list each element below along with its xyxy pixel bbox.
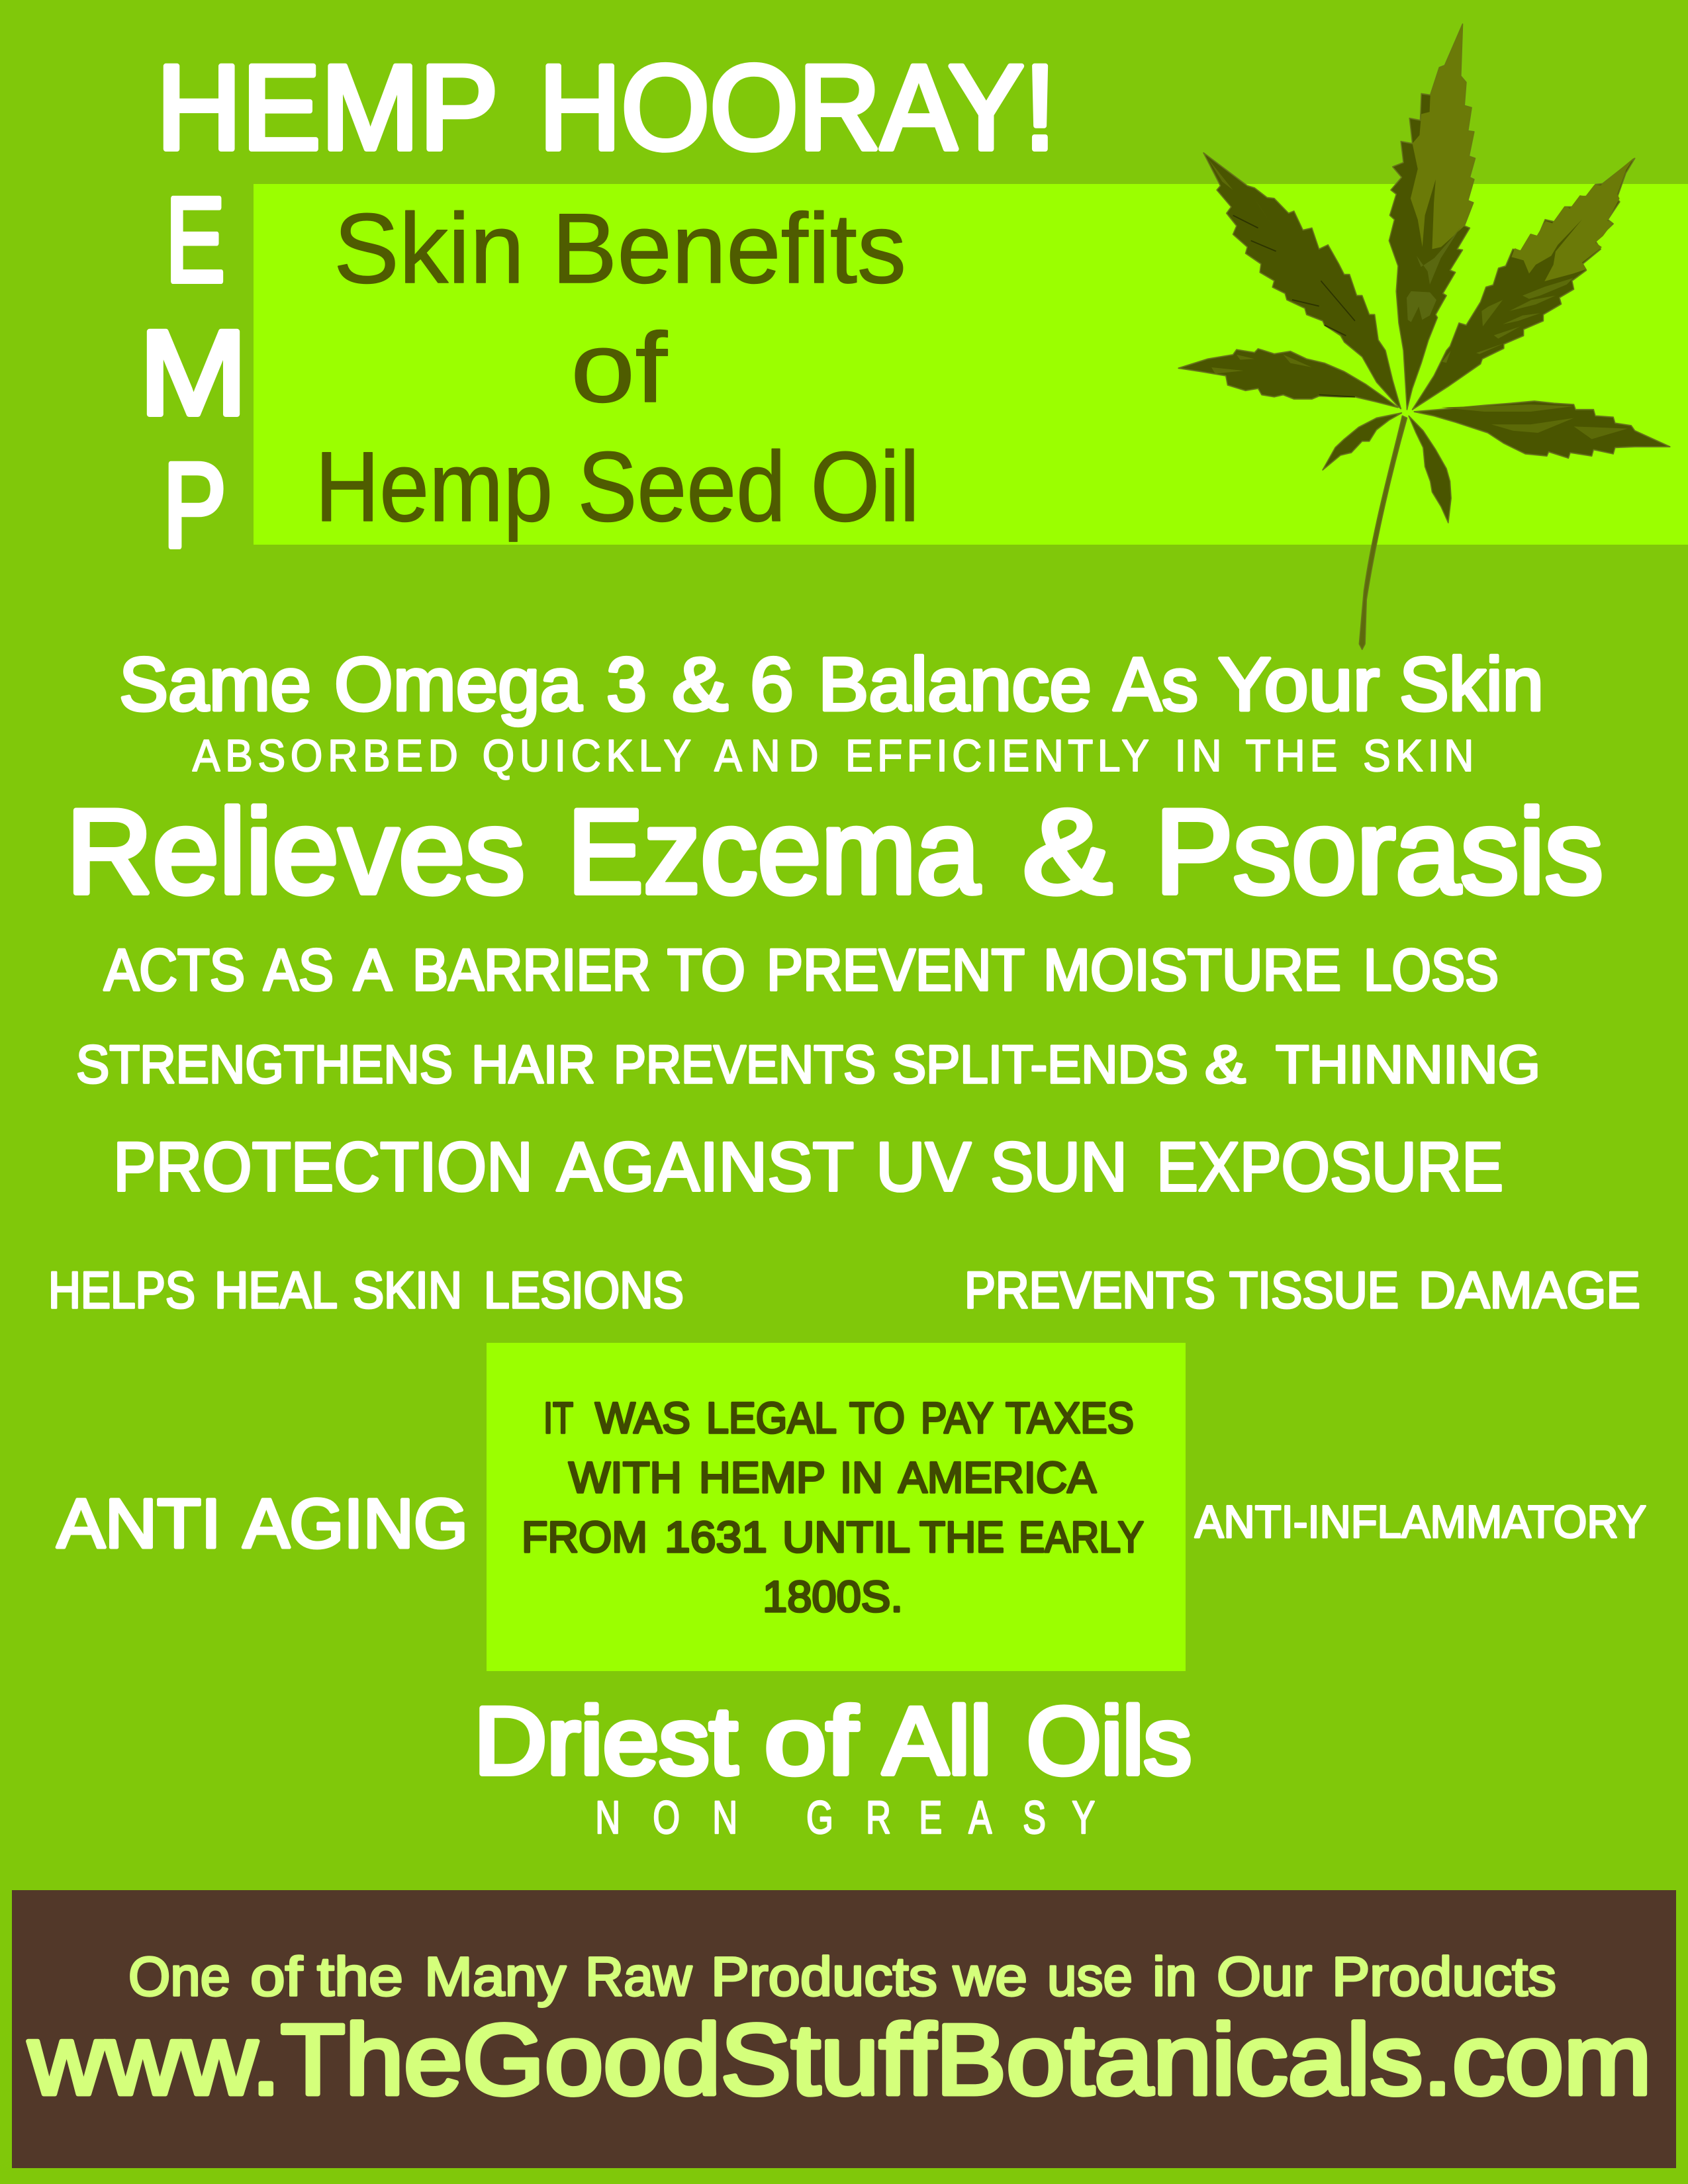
benefit: moisture barrier: BARRIER [412,936,651,1003]
benefit: uv protection [113,1128,1503,1206]
vertical title letters [139,172,248,572]
benefit: prevents tissue damage [964,1261,1640,1319]
benefit: driest of all oils: All [883,1688,992,1794]
title: HEMP HOORAY! [156,40,1056,175]
footer tagline: Products [1332,1946,1556,2007]
callout: hemp taxes fact: PAY [921,1393,994,1442]
footer tagline: Our [1217,1946,1312,2007]
benefit: strengthens hair: SPLIT-ENDS [892,1035,1188,1095]
callout: hemp taxes fact: TAXES [1006,1393,1134,1442]
callout: hemp taxes fact: THE [919,1512,1004,1561]
benefit: absorbed quickly: QUICKLY [483,731,691,781]
footer tagline [128,1946,1556,2007]
benefit: heals skin lesions: HELPS [48,1261,195,1319]
benefit: uv protection: PROTECTION [113,1128,533,1206]
benefit: strengthens hair [76,1035,1540,1095]
benefit: absorbed quickly: ABSORBED [193,731,458,781]
benefit: uv protection: AGAINST [557,1128,854,1206]
benefit: absorbed quickly: THE [1245,731,1337,781]
heading: skin benefits of hemp seed oil: Hemp Seed Oil [315,431,919,542]
callout: hemp taxes fact [487,1343,1186,1671]
benefit: omega balance: As [1113,643,1198,727]
callout: hemp taxes fact: IT [543,1393,573,1442]
vertical title letters: M [139,305,248,440]
benefit: moisture barrier: TO [667,936,745,1003]
panel: footer [12,1890,1676,2168]
callout: hemp taxes fact: LEGAL [706,1393,837,1442]
callout: hemp taxes fact: AMERICA [898,1453,1096,1502]
benefit: omega balance: 3 [606,643,647,727]
benefit: absorbed quickly [193,731,1474,781]
benefit: omega balance: & [672,643,728,727]
benefit: relieves ezcema and psorasis: Ezcema [567,785,980,919]
benefit: moisture barrier: LOSS [1364,936,1499,1003]
benefit: relieves ezcema and psorasis: & [1023,785,1112,919]
benefit: strengthens hair: PREVENTS [614,1035,876,1095]
footer tagline: of [250,1946,303,2007]
leaf shading streaks [1407,158,1634,363]
footer tagline: Products [711,1946,937,2007]
benefit: heals skin lesions [48,1261,684,1319]
benefit: prevents tissue damage: PREVENTS [964,1261,1215,1319]
callout: hemp taxes fact: 1800S. [763,1572,903,1621]
benefit: heals skin lesions: LESIONS [484,1261,684,1319]
benefit: anti aging: ANTI [57,1485,221,1563]
benefit: omega balance: Your [1218,643,1380,727]
panel: title band [254,184,1688,545]
heading: skin benefits of hemp seed oil: of [571,312,667,423]
callout: hemp taxes fact: WAS [595,1393,690,1442]
callout: hemp taxes fact: IN [840,1453,883,1502]
benefit: moisture barrier: PREVENT [767,936,1025,1003]
benefit: omega balance [119,643,1544,727]
benefit: omega balance: Balance [818,643,1092,727]
benefit: non greasy: NON GREASY [595,1792,1095,1843]
benefit: prevents tissue damage: DAMAGE [1419,1261,1640,1319]
benefit: heals skin lesions: SKIN [353,1261,462,1319]
benefit: strengthens hair: & [1205,1035,1246,1095]
benefit: moisture barrier: MOISTURE [1043,936,1341,1003]
benefit: strengthens hair: THINNING [1276,1035,1540,1095]
benefit: omega balance: Skin [1399,643,1544,727]
callout: hemp taxes fact: WITH [569,1453,682,1502]
vertical title letters: P [163,437,226,572]
benefit: anti aging [57,1485,468,1563]
callout: hemp taxes fact: TO [849,1393,905,1442]
benefit: uv protection: EXPOSURE [1156,1128,1503,1206]
footer tagline: One [128,1946,230,2007]
benefit: absorbed quickly: IN [1175,731,1222,781]
leaf outline shapes [1178,24,1670,649]
vertical title letters: E [165,172,225,307]
benefit: absorbed quickly: AND [714,731,818,781]
footer tagline: the [317,1946,403,2007]
benefit: moisture barrier: A [353,936,393,1003]
footer tagline: Raw [585,1946,692,2007]
benefit: anti aging: AGING [243,1485,468,1563]
benefit: heals skin lesions: HEAL [214,1261,338,1319]
benefit: driest of all oils: of [765,1688,858,1794]
title: HEMP HOORAY!: HEMP [156,40,498,175]
icon: hemp leaf [1178,24,1670,649]
benefit: uv protection: SUN [990,1128,1127,1206]
benefit: driest of all oils: Oils [1027,1688,1192,1794]
callout: hemp taxes fact: FROM [522,1512,647,1561]
callout: hemp taxes fact: HEMP [699,1453,825,1502]
callout: hemp taxes fact: 1631 [665,1512,767,1561]
benefit: strengthens hair: STRENGTHENS [76,1035,453,1095]
benefit: strengthens hair: HAIR [471,1035,595,1095]
benefit: moisture barrier: ACTS [104,936,245,1003]
footer tagline: use [1047,1946,1133,2007]
benefit: anti-inflammatory: ANTI-INFLAMMATORY [1195,1496,1646,1547]
footer tagline: Many [424,1946,567,2007]
title: HEMP HOORAY!: HOORAY! [539,40,1056,175]
footer tagline: we [953,1946,1027,2007]
heading: skin benefits of hemp seed oil: Skin Benefits [334,193,906,304]
footer website: www.TheGoodStuffBotanicals.com [28,2003,1652,2115]
benefit: driest of all oils [474,1688,1192,1794]
benefit: moisture barrier [104,936,1499,1003]
benefit: driest of all oils: Driest [474,1688,737,1794]
benefit: relieves ezcema and psorasis [66,785,1603,919]
benefit: absorbed quickly: EFFICIENTLY [845,731,1149,781]
benefit: omega balance: Omega [334,643,583,727]
benefit: relieves ezcema and psorasis: Relieves [66,785,525,919]
benefit: relieves ezcema and psorasis: Psorasis [1155,785,1603,919]
benefit: prevents tissue damage: TISSUE [1229,1261,1399,1319]
callout: hemp taxes fact: EARLY [1019,1512,1144,1561]
footer tagline: in [1152,1946,1197,2007]
benefit: uv protection: UV [876,1128,971,1206]
benefit: absorbed quickly: SKIN [1363,731,1474,781]
benefit: omega balance: Same [119,643,311,727]
benefit: moisture barrier: AS [263,936,334,1003]
benefit: omega balance: 6 [750,643,794,727]
callout: hemp taxes fact: UNTIL [782,1512,910,1561]
heading: skin benefits of hemp seed oil [315,193,919,542]
